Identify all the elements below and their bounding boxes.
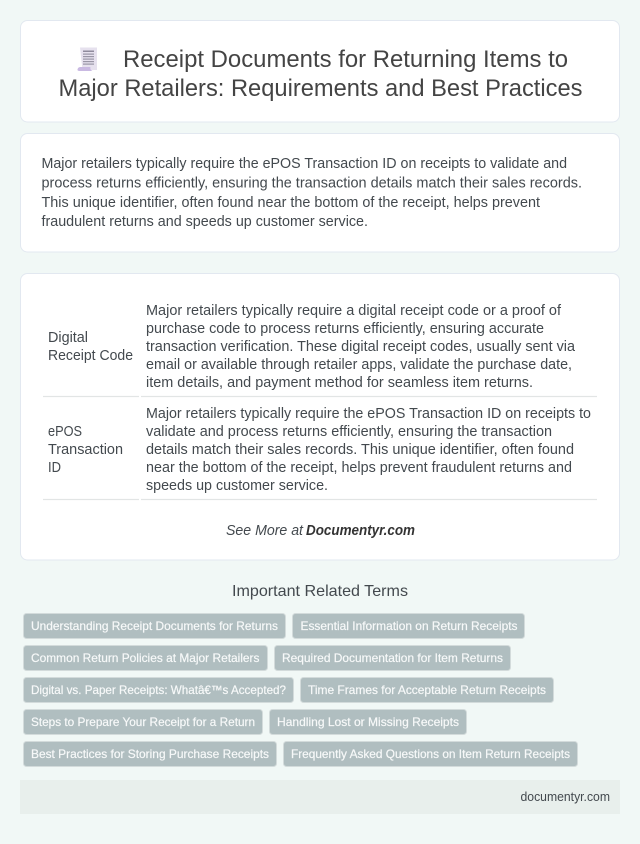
link: see more: See More at bbox=[226, 523, 304, 539]
footer bar: documentyr.com bbox=[520, 790, 610, 804]
table row: ePOS Transaction ID: validate and process returns efficiently, ensuring the transaction bbox=[146, 424, 552, 440]
heading: title bbox=[58, 46, 582, 102]
table row: ePOS Transaction ID: speeds up customer service. bbox=[146, 478, 328, 494]
heading: title: Major Retailers: Requirements and Best Practices bbox=[58, 75, 582, 102]
tag list: related terms: Common Return Policies at Major Retailers bbox=[31, 651, 260, 665]
tag list: related terms: Steps to Prepare Your Receipt for a Return bbox=[31, 715, 255, 729]
panel: title card bbox=[20, 20, 620, 122]
icon: receipt bbox=[78, 48, 97, 71]
link: see more bbox=[226, 523, 415, 539]
link: see more: Documentyr.com bbox=[306, 523, 415, 539]
tag list: related terms: Required Documentation for Item Returns bbox=[282, 651, 503, 665]
table row: ePOS Transaction ID: near the bottom of the receipt, helps prevent fraudulent returns and bbox=[146, 460, 572, 476]
tag list: related terms: Frequently Asked Questions on Item Return Receipts bbox=[291, 747, 570, 761]
panel: intro text: Major retailers typically require the ePOS Transaction ID on receipts to validate and bbox=[42, 156, 567, 172]
footer bar bbox=[20, 780, 620, 814]
table row: ePOS Transaction ID: details match their sales records. This unique identifier, often found bbox=[146, 442, 574, 458]
table row: Digital Receipt Code: transaction verification. These digital receipt codes, usually sent via bbox=[146, 339, 576, 355]
table row: Digital Receipt Code: Major retailers typically require a digital receipt code or a proof of bbox=[146, 303, 562, 319]
tag list: related terms: Best Practices for Storing Purchase Receipts bbox=[31, 747, 269, 761]
table row: ePOS Transaction ID: ePOS bbox=[48, 424, 82, 440]
table row: Digital Receipt Code: item details, and payment method for seamless item returns. bbox=[146, 375, 533, 391]
table row: ePOS Transaction ID: Transaction bbox=[48, 442, 123, 458]
tag list: related terms: Time Frames for Acceptable Return Receipts bbox=[308, 683, 546, 697]
panel: comparison table bbox=[20, 274, 620, 560]
tag list: related terms: Digital vs. Paper Receipts: Whatâ€™s Accepted? bbox=[31, 683, 286, 697]
panel: intro text: This unique identifier, often found near the bottom of the receipt, helps prevent bbox=[42, 195, 540, 211]
table row: ePOS Transaction ID bbox=[43, 406, 597, 500]
table row: ePOS Transaction ID: ID bbox=[48, 460, 61, 476]
tag list: related terms bbox=[24, 614, 578, 766]
table row: ePOS Transaction ID: Major retailers typically require the ePOS Transaction ID on receipts to bbox=[146, 406, 591, 422]
table row: Digital Receipt Code bbox=[43, 303, 597, 396]
heading: important related terms: Important Related Terms bbox=[232, 583, 408, 600]
table row: Digital Receipt Code: purchase code to process returns efficiently, ensuring accurate bbox=[146, 321, 544, 337]
tag list: related terms: Essential Information on Return Receipts bbox=[300, 619, 518, 633]
panel: intro text: fraudulent returns and speeds up customer service. bbox=[42, 214, 368, 230]
tag list: related terms: Handling Lost or Missing Receipts bbox=[277, 715, 459, 729]
table row: Digital Receipt Code: email or available through retailer apps, validate the purchase date, bbox=[146, 357, 572, 373]
panel: intro text: process returns efficiently, ensuring the transaction details match their sales records. bbox=[42, 176, 582, 192]
table row: Digital Receipt Code: Receipt Code bbox=[48, 348, 133, 364]
tag list: related terms: Understanding Receipt Documents for Returns bbox=[31, 619, 278, 633]
panel: intro text bbox=[20, 134, 620, 252]
table row: Digital Receipt Code: Digital bbox=[48, 330, 88, 346]
heading: title: Receipt Documents for Returning Items to bbox=[123, 46, 568, 73]
